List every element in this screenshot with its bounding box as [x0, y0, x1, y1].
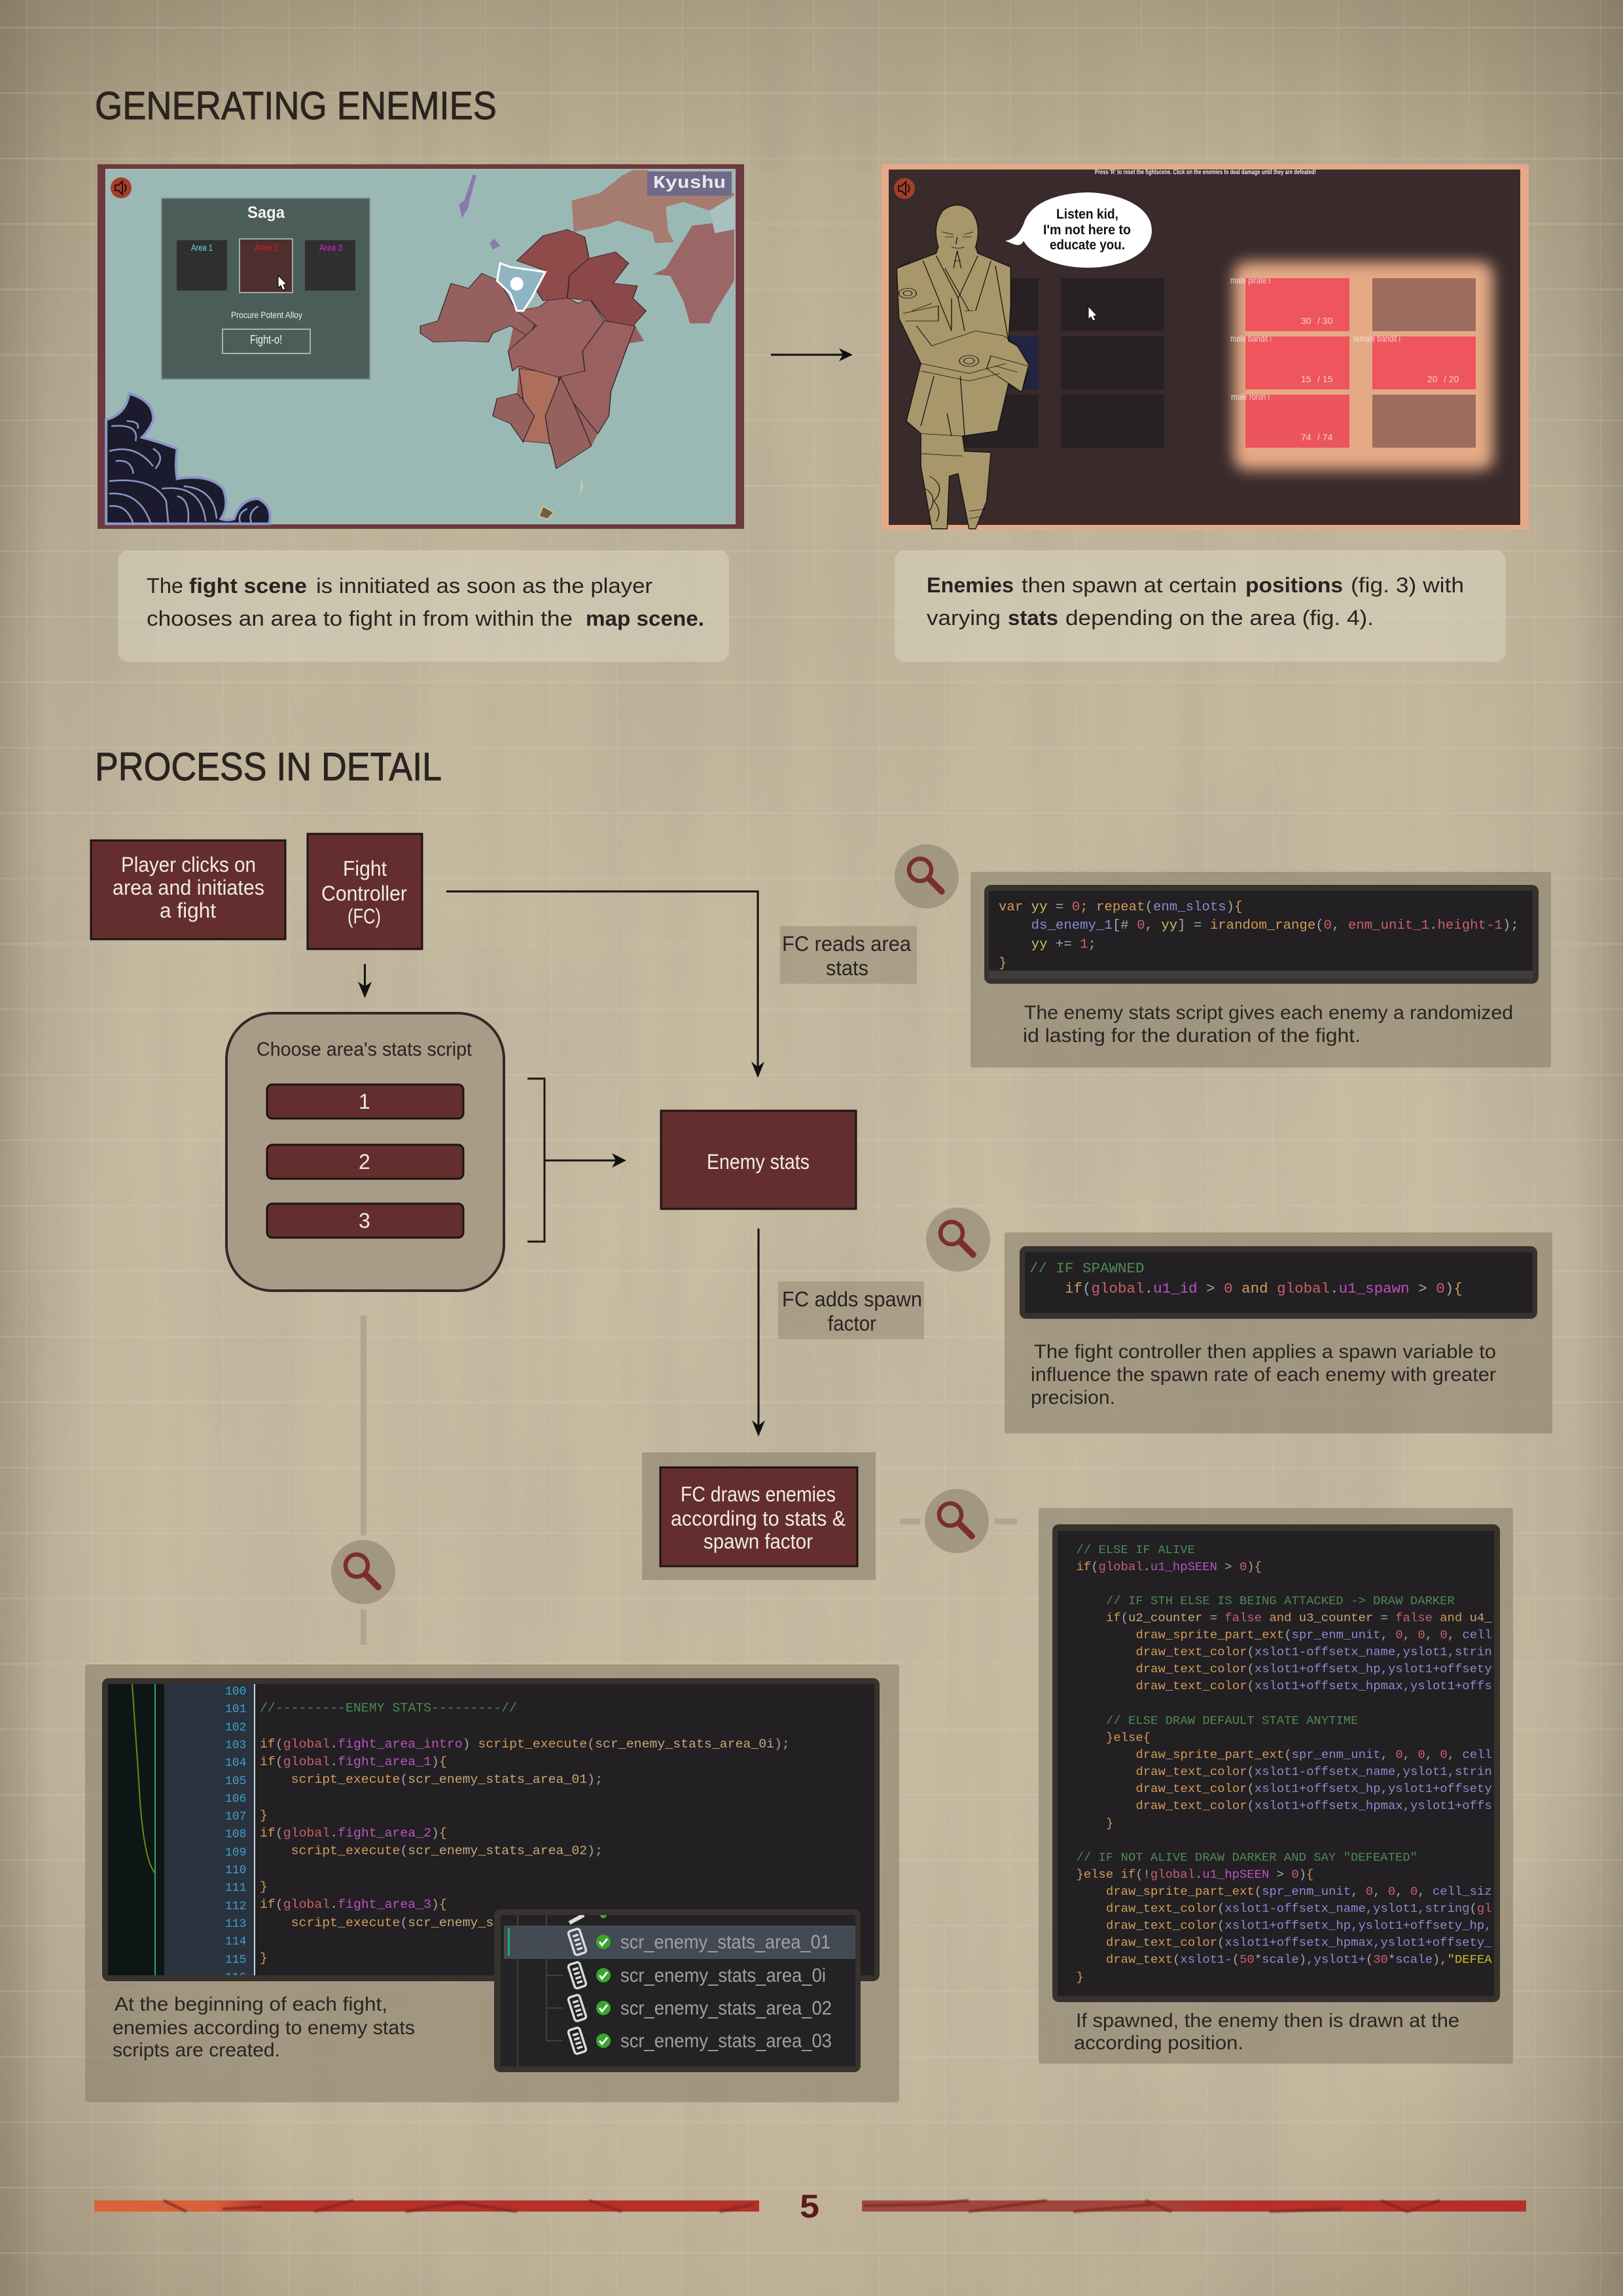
code window: script_execute(scr_enemy_stats_area_01); — [260, 1772, 603, 1787]
caption: enemies spawn: depending on the area (fig. 4). — [1065, 606, 1374, 630]
caption: enemies spawn: varying — [927, 606, 1001, 630]
speech bubble: educate you. — [1050, 238, 1125, 253]
explanation text: The fight controller then applies a spawn variable to — [1034, 1341, 1496, 1363]
flow box: fight controller: Controller — [321, 882, 407, 905]
enemy cards: / 30 — [1317, 315, 1333, 326]
explanation text: influence the spawn rate of each enemy with greater — [1031, 1364, 1496, 1386]
explanation text: If spawned, the enemy then is drawn at the — [1076, 2010, 1459, 2032]
label: FC adds spawn factor: FC adds spawn — [782, 1287, 922, 1311]
caption: enemies spawn: (fig. 3) with — [1351, 573, 1464, 597]
script option 1 — [267, 1085, 463, 1119]
explanation text: id lasting for the duration of the fight. — [1023, 1025, 1361, 1047]
explanation text: enemies according to enemy stats — [113, 2017, 415, 2039]
title: generating enemies: GENERATING ENEMIES — [95, 84, 497, 128]
label: Kyushu — [647, 171, 732, 196]
code window: script_execute(scr_enemy_stats_area_03); — [260, 1915, 603, 1930]
code window: 112 — [225, 1900, 246, 1913]
panel: Saga area chooser: Area 2 — [255, 242, 278, 253]
code window: if(global.fight_area_intro) script_execute(scr_enemy_stats_area_0i); — [260, 1736, 790, 1751]
code window: if(global.fight_area_2){ — [260, 1825, 447, 1840]
row: scr_enemy_stats_area_0i: scr_enemy_stats_area_0i — [620, 1965, 826, 1986]
row: scr_enemy_stats_area_02: scr_enemy_stats_area_02 — [620, 1998, 832, 2019]
enemy cards: male bandit i — [1230, 333, 1272, 344]
code window: ds_enemy_1[# 0, yy] = irandom_range(0, enm_unit_1.height-1); — [999, 918, 1519, 933]
code window: draw_text_color(xslot1+offsetx_hpmax,yslot1+offs — [1136, 1799, 1492, 1813]
code window: 100 — [225, 1685, 246, 1698]
caption: fight scene: chooses an area to fight in from within the — [147, 607, 573, 630]
code window: 107 — [225, 1810, 246, 1823]
icon: decorative wave — [106, 393, 270, 524]
label: FC reads area stats: stats — [826, 956, 868, 980]
panel: Saga area chooser — [162, 198, 370, 379]
caption: enemies spawn: stats — [1008, 606, 1058, 630]
enemy cards: / 15 — [1317, 374, 1333, 384]
caption: fight scene: The — [147, 574, 183, 598]
code window: if(global.fight_area_1){ — [260, 1754, 447, 1769]
title: process in detail: PROCESS IN DETAIL — [95, 745, 442, 789]
code window: draw_text_color(xslot1-offsetx_name,yslot1,strin — [1136, 1765, 1492, 1779]
illustration: teacher character — [897, 205, 1029, 529]
enemy cards: 30 — [1301, 315, 1311, 326]
explanation text — [1023, 1002, 1513, 1047]
enemy cards: / 74 — [1317, 432, 1333, 442]
code window: 116 — [225, 1971, 246, 1984]
script option 2 — [267, 1145, 463, 1179]
code window — [102, 1678, 880, 1984]
explanation text — [1031, 1341, 1496, 1408]
screenshot: fight scene — [882, 164, 1529, 529]
code window: 102 — [225, 1721, 246, 1734]
row: scr_enemy_stats_area_01: scr_enemy_stats_area_01 — [620, 1931, 830, 1953]
code window: 105 — [225, 1775, 246, 1788]
script option 2: 2 — [359, 1150, 370, 1174]
explanation text: scripts are created. — [113, 2039, 280, 2061]
code window: } — [999, 956, 1007, 971]
screenshot: map scene — [98, 164, 744, 529]
code window: draw_text_color(xslot1+offsetx_hp,yslot1+offsety — [1136, 1782, 1492, 1796]
caption: enemies spawn: positions — [1245, 573, 1343, 597]
icon: magnifier 2 — [926, 1208, 990, 1272]
flow box: enemy stats — [661, 1111, 856, 1209]
code window: }else{ — [1106, 1731, 1150, 1745]
flow box: player clicks: Player clicks on — [121, 853, 256, 876]
enemy slots: empty left grid — [935, 278, 1164, 448]
explanation text — [1074, 2010, 1459, 2054]
caption: fight scene: is innitiated as soon as the player — [316, 574, 652, 598]
caption: enemies spawn: then spawn at certain — [1022, 573, 1237, 597]
footer: red bar left — [94, 2200, 759, 2212]
code window: draw_text_color(xslot1+offsetx_hpmax,yslot1+offsety_ — [1106, 1935, 1492, 1950]
caption: fight scene: map scene. — [586, 607, 704, 630]
enemy cards: 74 — [1301, 432, 1311, 442]
code window: if(global.fight_area_3){ — [260, 1897, 447, 1912]
map: Kyushu islands — [106, 170, 734, 524]
code window: 115 — [225, 1954, 246, 1967]
flow box: player clicks: area and initiates — [113, 876, 264, 899]
caption: enemies spawn — [895, 550, 1506, 662]
row: scr_enemy_stats_area_0i — [568, 1962, 826, 1989]
flow box: FC draws enemies — [642, 1452, 876, 1580]
speech bubble: I'm not here to — [1043, 223, 1131, 238]
flow box: player clicks: a fight — [160, 899, 216, 922]
code window: 110 — [225, 1864, 246, 1877]
row: scr_enemy_stats_area_03 — [568, 2027, 832, 2054]
bracket arrow to enemy stats — [527, 1079, 626, 1242]
caption: enemies spawn: Enemies — [927, 573, 1014, 597]
code window — [1052, 1524, 1500, 2002]
enemy cards: female bandit i — [1353, 333, 1400, 344]
code window: draw_sprite_part_ext(spr_enm_unit, 0, 0, 0, cell — [1136, 1748, 1492, 1762]
enemy cards: male pirate i — [1230, 275, 1270, 285]
label: Kyushu: Kyushu — [653, 174, 726, 194]
row: scr_enemy_stats_area_03: scr_enemy_stats_area_03 — [620, 2030, 832, 2052]
icon: cursor — [1088, 306, 1097, 321]
caption: fight scene — [118, 550, 729, 662]
code window: draw_text_color(xslot1+offsetx_hpmax,yslot1+offs — [1136, 1679, 1492, 1693]
row: scr_enemy_stats_area_02 — [568, 1994, 832, 2022]
code window: 109 — [225, 1846, 246, 1859]
flow box: fight controller: Fight — [343, 857, 387, 880]
code window: } — [1076, 1970, 1084, 1984]
code window: draw_text_color(xslot1-offsetx_name,yslot1,strin — [1136, 1645, 1492, 1659]
instruction text: Press 'R' to reset the fightscene. Click on the enemies to deal damage until they are defeated! — [1095, 169, 1316, 176]
flow box: FC draws enemies: according to stats & — [671, 1507, 846, 1530]
panel: Saga area chooser: Procure Potent Alloy — [231, 310, 302, 320]
code window: // IF STH ELSE IS BEING ATTACKED -> DRAW DARKER — [1106, 1594, 1455, 1608]
speech bubble — [1005, 192, 1152, 268]
flow box: FC draws enemies: FC draws enemies — [681, 1482, 836, 1506]
caption: fight scene: fight scene — [189, 574, 307, 598]
flow box: fight controller — [308, 834, 422, 949]
label: FC adds spawn factor: factor — [828, 1312, 876, 1335]
code window — [984, 885, 1539, 984]
code window — [1020, 1246, 1537, 1319]
row: scr_enemy_stats_area_01 — [568, 1928, 830, 1956]
code window: 111 — [225, 1882, 246, 1895]
flow box: enemy stats: Enemy stats — [707, 1150, 810, 1174]
explanation text: The enemy stats script gives each enemy a randomized — [1024, 1002, 1513, 1024]
code window: 106 — [225, 1793, 246, 1806]
script option 3 — [267, 1204, 463, 1238]
code window: draw_text_color(xslot1-offsetx_name,yslot1,string(gl — [1106, 1901, 1492, 1916]
code window: // IF NOT ALIVE DRAW DARKER AND SAY "DEFEATED" — [1076, 1850, 1418, 1865]
code window: //---------ENEMY STATS---------// — [260, 1700, 517, 1715]
code window: 101 — [225, 1703, 246, 1716]
panel: Saga area chooser: Area 3 — [319, 242, 342, 253]
code window: 114 — [225, 1935, 246, 1948]
enemy cards — [1230, 275, 1476, 448]
code window: }else if(!global.u1_hpSEEN > 0){ — [1076, 1867, 1313, 1882]
enemy cards: 20 — [1427, 374, 1438, 384]
icon: sound button — [111, 177, 132, 198]
label: FC adds spawn factor — [778, 1282, 924, 1339]
panel: Saga area chooser: Saga — [247, 204, 285, 222]
code window: draw_text_color(xslot1+offsetx_hp,yslot1+offsety_hp, — [1106, 1918, 1492, 1933]
explanation text: according position. — [1074, 2032, 1243, 2054]
flow box: player clicks — [91, 840, 285, 939]
popup: script file tree — [494, 1909, 861, 2072]
footer: red bar right — [862, 2200, 1526, 2212]
arrow: map to fight scene — [771, 348, 853, 361]
panel: choose area's stats script: Choose area's stats script — [257, 1039, 473, 1060]
panel: Saga area chooser: Fight-o! — [250, 333, 282, 346]
script option 1: 1 — [359, 1090, 370, 1113]
enemy cards: male ronin i — [1231, 391, 1270, 402]
connector and magnifier 4 — [331, 1316, 395, 1645]
panel: fight start code — [85, 1664, 899, 2102]
icon: magnifier 1 — [895, 844, 959, 908]
enemy cards: 15 — [1301, 374, 1311, 384]
label: FC reads area stats — [780, 926, 917, 984]
code window: // IF SPAWNED — [1029, 1260, 1145, 1277]
connector and magnifier 3 — [900, 1489, 1017, 1553]
code window: yy += 1; — [999, 937, 1096, 952]
code window: 113 — [225, 1918, 246, 1931]
enemy cards: / 20 — [1444, 374, 1459, 384]
panel: Saga area chooser: Area 1 — [191, 242, 213, 253]
panel: choose area's stats script — [226, 1013, 504, 1291]
code window: draw_text_color(xslot1+offsetx_hp,yslot1+offsety — [1136, 1662, 1492, 1676]
label: FC reads area stats: FC reads area — [782, 932, 911, 956]
code window: var yy = 0; repeat(enm_slots){ — [999, 900, 1243, 915]
panel: stats script code — [971, 872, 1551, 1067]
arrow: controller to script chooser — [358, 964, 372, 998]
speech bubble: Listen kid, — [1056, 207, 1118, 222]
explanation text — [113, 1994, 415, 2061]
code window: // ELSE DRAW DEFAULT STATE ANYTIME — [1106, 1713, 1358, 1728]
code window: 104 — [225, 1757, 246, 1770]
code window: } — [260, 1950, 268, 1965]
code window: } — [1106, 1816, 1113, 1831]
code window: draw_text(xslot1-(50*scale),yslot1+(30*scale),"DEFEA — [1106, 1952, 1492, 1967]
code window: script_execute(scr_enemy_stats_area_02); — [260, 1843, 603, 1858]
code window: if(u2_counter = false and u3_counter = false and u4_ — [1106, 1611, 1492, 1625]
code window: // ELSE IF ALIVE — [1076, 1543, 1195, 1557]
script option 3: 3 — [359, 1209, 370, 1232]
code window: draw_sprite_part_ext(spr_enm_unit, 0, 0, 0, cell — [1136, 1628, 1492, 1642]
code window: } — [260, 1808, 268, 1823]
code window: if(global.u1_id > 0 and global.u1_spawn > 0){ — [1065, 1280, 1463, 1297]
code window: 108 — [225, 1828, 246, 1841]
page number: 5 — [800, 2188, 819, 2225]
code window: } — [260, 1879, 268, 1894]
icon: sound button — [894, 178, 915, 199]
code window: draw_sprite_part_ext(spr_enm_unit, 0, 0, 0, cell_siz — [1106, 1884, 1492, 1899]
panel: draw code — [1039, 1508, 1513, 2064]
arrow: FC reads area stats — [446, 891, 764, 1078]
explanation text: precision. — [1031, 1387, 1115, 1408]
explanation text: At the beginning of each fight, — [115, 1994, 387, 2015]
arrow: FC adds spawn factor — [752, 1229, 765, 1437]
code window: if(global.u1_hpSEEN > 0){ — [1076, 1560, 1262, 1574]
flow box: FC draws enemies: spawn factor — [704, 1530, 813, 1553]
panel: spawn code — [1005, 1232, 1552, 1433]
flow box: fight controller: (FC) — [348, 905, 381, 928]
code window: 103 — [225, 1739, 246, 1752]
